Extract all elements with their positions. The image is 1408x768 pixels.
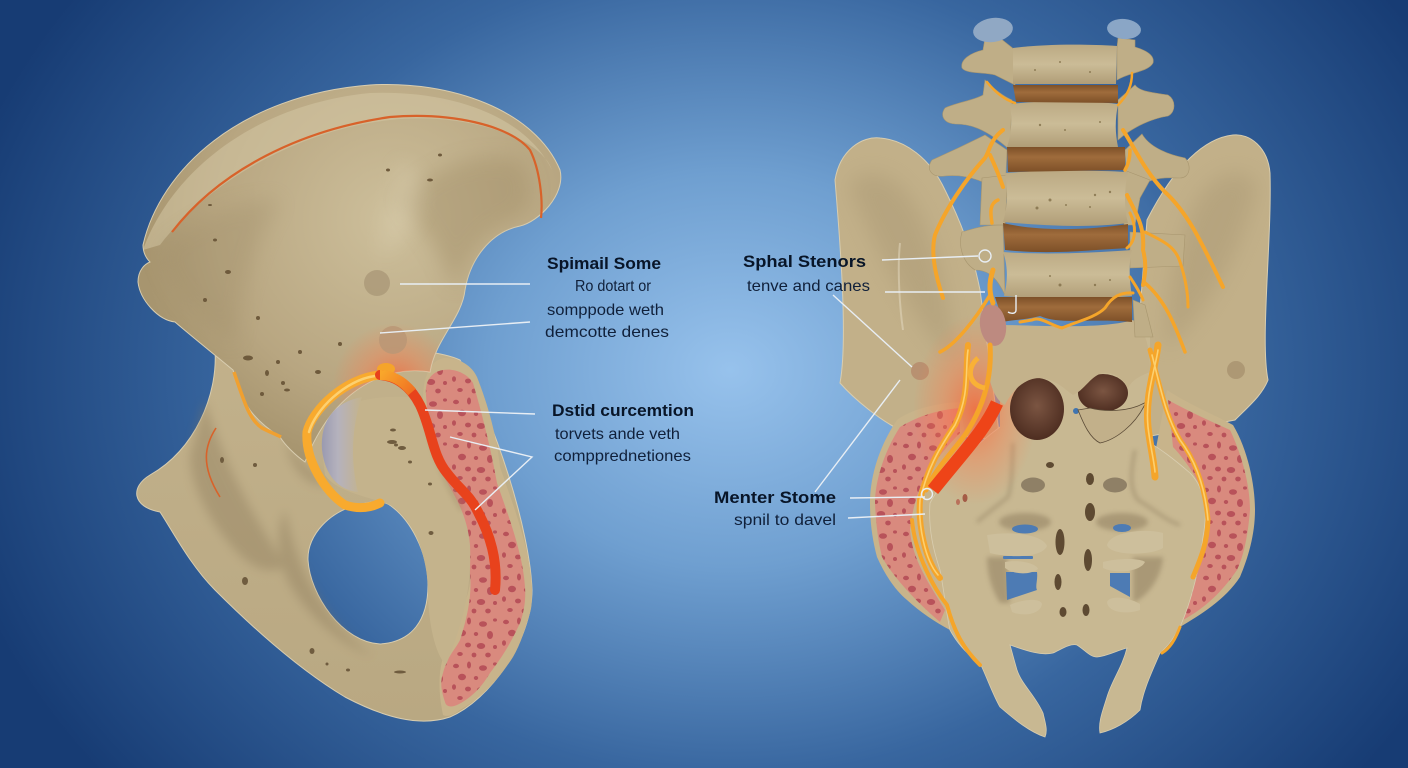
posterior orange nerve (234, 372, 281, 437)
left iliac wing (835, 138, 1000, 440)
spongy bone tissue (426, 370, 525, 706)
red compressed nerve (933, 403, 997, 490)
lower hip bone with ring (137, 345, 532, 721)
bone speckles (220, 428, 434, 674)
leader lines (380, 250, 1016, 518)
nerve root knot (377, 363, 395, 375)
ilium wing (138, 84, 561, 462)
inflammation glow (913, 315, 1037, 505)
sacral bars (987, 531, 1163, 614)
vertebra top cap right (1106, 18, 1142, 40)
label: lower right: spnil to davel (734, 512, 836, 529)
vertebra bodies (1003, 45, 1132, 299)
intervertebral discs (995, 85, 1132, 322)
ilium surface shading (144, 93, 551, 402)
small red nerve line (206, 428, 220, 497)
bone behind central openings (1000, 330, 1150, 445)
vertebra top cap left (972, 15, 1014, 45)
nerve transition highlight (380, 375, 412, 392)
sacrum (930, 427, 1205, 737)
nerve roots (912, 73, 1223, 665)
red nerve (380, 375, 496, 590)
right iliac wing (1130, 135, 1270, 440)
label: lower left: Dstid curcemtion (552, 401, 694, 420)
pink lump (977, 302, 1009, 348)
right pink outer rim (1150, 390, 1255, 627)
nerve highlights (920, 350, 1208, 575)
sacral recess shading (977, 443, 1180, 603)
sacrum windows (1003, 524, 1131, 600)
label: lower left: compprednetiones (554, 448, 691, 465)
loop highlight (309, 376, 375, 432)
ring nerve (970, 358, 985, 388)
spine and sacrum illustration (835, 15, 1270, 737)
label: lower right (714, 488, 836, 529)
label: upper left: Ro dotart or (575, 278, 652, 295)
vertebra speckles (1034, 61, 1111, 286)
label: upper left: demcotte denes (545, 324, 669, 341)
crest nerve line (172, 116, 542, 232)
orange sciatic loop (307, 375, 380, 508)
label: upper right: Sphal Stenors (743, 252, 866, 271)
left pink outer rim (870, 402, 975, 630)
ischium shading (190, 400, 372, 655)
label: lower right: Menter Stome (714, 488, 836, 507)
label: upper right: tenve and canes (747, 278, 870, 295)
femoral neck (322, 397, 470, 665)
sacral promontory block (1078, 402, 1146, 443)
hip bone illustration (137, 84, 561, 721)
label: upper left: somppode weth (547, 302, 664, 319)
iliac wing spots (911, 361, 1245, 380)
brown central openings (1010, 374, 1128, 440)
label: lower left: torvets ande veth (555, 426, 680, 443)
iliac wing shading (848, 173, 1258, 360)
pelvis surface highlight (899, 243, 903, 330)
label: upper right (743, 252, 870, 295)
transverse processes and pedicles (929, 38, 1189, 337)
left spongy tissue (875, 408, 960, 622)
neck shading (425, 410, 462, 510)
label: upper left (545, 254, 669, 341)
femoral head (322, 397, 362, 492)
label: upper left: Spimail Some (547, 254, 661, 273)
label: lower left (552, 401, 694, 465)
L5 arch (988, 320, 1150, 405)
right spongy tissue (1168, 400, 1250, 620)
bone cross-section outer rim (423, 358, 532, 716)
sacral foramina (956, 462, 1127, 617)
